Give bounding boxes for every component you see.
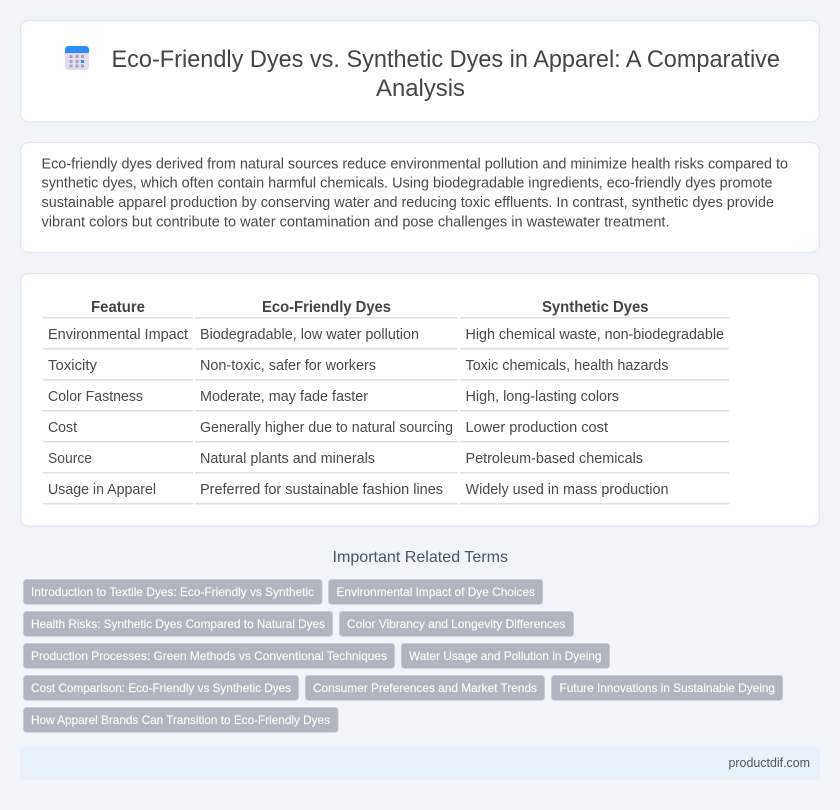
- table row: Usage in Apparel: [43, 482, 729, 504]
- intro paragraph: vibrant colors but contribute to water contamination and pose challenges in wastewater treatment.: [42, 214, 670, 230]
- table row: Source: Source: [48, 451, 92, 467]
- table row: Cost: [43, 420, 729, 442]
- title: [112, 46, 780, 102]
- table row: Source: Natural plants and minerals: [200, 451, 375, 467]
- tag: Production Processes: Green Methods vs Conventional Techniques: [31, 649, 387, 663]
- table row: Color Fastness: Color Fastness: [48, 389, 143, 405]
- icon: calendar: [65, 46, 89, 70]
- tag: Color Vibrancy and Longevity Differences: [347, 617, 566, 631]
- intro paragraph: sustainable apparel production by conserving water and reducing toxic effluents. In contrast, synthetic dyes provide: [42, 195, 774, 211]
- tag: [552, 676, 782, 700]
- tag: [328, 580, 542, 604]
- table row: Toxicity: [43, 358, 729, 380]
- intro paragraph: synthetic dyes, which often contain harmful chemicals. Using biodegradable ingredients, eco-friendly dyes promote: [42, 176, 772, 192]
- tag: Water Usage and Pollution in Dyeing: [409, 649, 602, 663]
- table row: Toxicity: Toxicity: [48, 358, 98, 374]
- tag: Environmental Impact of Dye Choices: [336, 585, 535, 599]
- table row: Environmental Impact: Environmental Impact: [48, 327, 188, 343]
- table row: Environmental Impact: High chemical waste, non-biodegradable: [466, 327, 724, 343]
- tag: [24, 580, 322, 604]
- tag: [24, 644, 394, 668]
- table row: Cost: Generally higher due to natural sourcing: [200, 420, 453, 436]
- panel: intro text: [21, 143, 819, 252]
- title: Eco-Friendly Dyes vs. Synthetic Dyes in Apparel: A Comparative: [112, 46, 780, 73]
- tag: Introduction to Textile Dyes: Eco-Friendly vs Synthetic: [31, 585, 314, 599]
- heading: Important Related Terms: Important Related Terms: [332, 549, 508, 566]
- tag: How Apparel Brands Can Transition to Eco-Friendly Dyes: [31, 713, 330, 727]
- table row: Color Fastness: High, long-lasting colors: [466, 389, 619, 405]
- panel: comparison table: [21, 274, 819, 526]
- table row: Environmental Impact: [43, 327, 729, 350]
- table row: Source: [43, 451, 729, 474]
- title: Analysis: [376, 75, 465, 102]
- intro paragraph: [42, 156, 788, 230]
- table row: Color Fastness: [43, 389, 729, 412]
- table row: Environmental Impact: Biodegradable, low water pollution: [200, 327, 419, 343]
- tag: Health Risks: Synthetic Dyes Compared to Natural Dyes: [31, 617, 325, 631]
- table header row: Synthetic Dyes: [542, 299, 649, 316]
- table row: Usage in Apparel: Usage in Apparel: [48, 482, 156, 498]
- table row: Color Fastness: Moderate, may fade faster: [200, 389, 368, 405]
- table row: Toxicity: Toxic chemicals, health hazards: [466, 358, 668, 374]
- related term tags: [24, 580, 782, 732]
- table row: Source: Petroleum-based chemicals: [466, 451, 643, 467]
- table row: Usage in Apparel: Preferred for sustainable fashion lines: [200, 482, 443, 498]
- table header row: Feature: [91, 299, 145, 316]
- tag: [24, 612, 332, 636]
- panel: header: [21, 21, 819, 122]
- table row: Cost: Lower production cost: [466, 420, 608, 436]
- table row: Cost: Cost: [48, 420, 77, 436]
- intro paragraph: Eco-friendly dyes derived from natural sources reduce environmental pollution and minimize health risks compared to: [42, 156, 788, 172]
- table header row: Eco-Friendly Dyes: [262, 299, 391, 316]
- table row: Usage in Apparel: Widely used in mass production: [466, 482, 668, 498]
- tag: [402, 644, 610, 668]
- tag: [24, 708, 338, 732]
- tag: Consumer Preferences and Market Trends: [313, 681, 537, 695]
- table row: Toxicity: Non-toxic, safer for workers: [200, 358, 376, 374]
- tag: [340, 612, 574, 636]
- tag: [24, 676, 298, 700]
- table header row: [43, 299, 729, 318]
- footer: productdif.com: [728, 755, 810, 770]
- footer: [20, 746, 820, 780]
- tag: [306, 676, 544, 700]
- tag: Cost Comparison: Eco-Friendly vs Synthetic Dyes: [31, 681, 291, 695]
- tag: Future Innovations in Sustainable Dyeing: [560, 681, 775, 695]
